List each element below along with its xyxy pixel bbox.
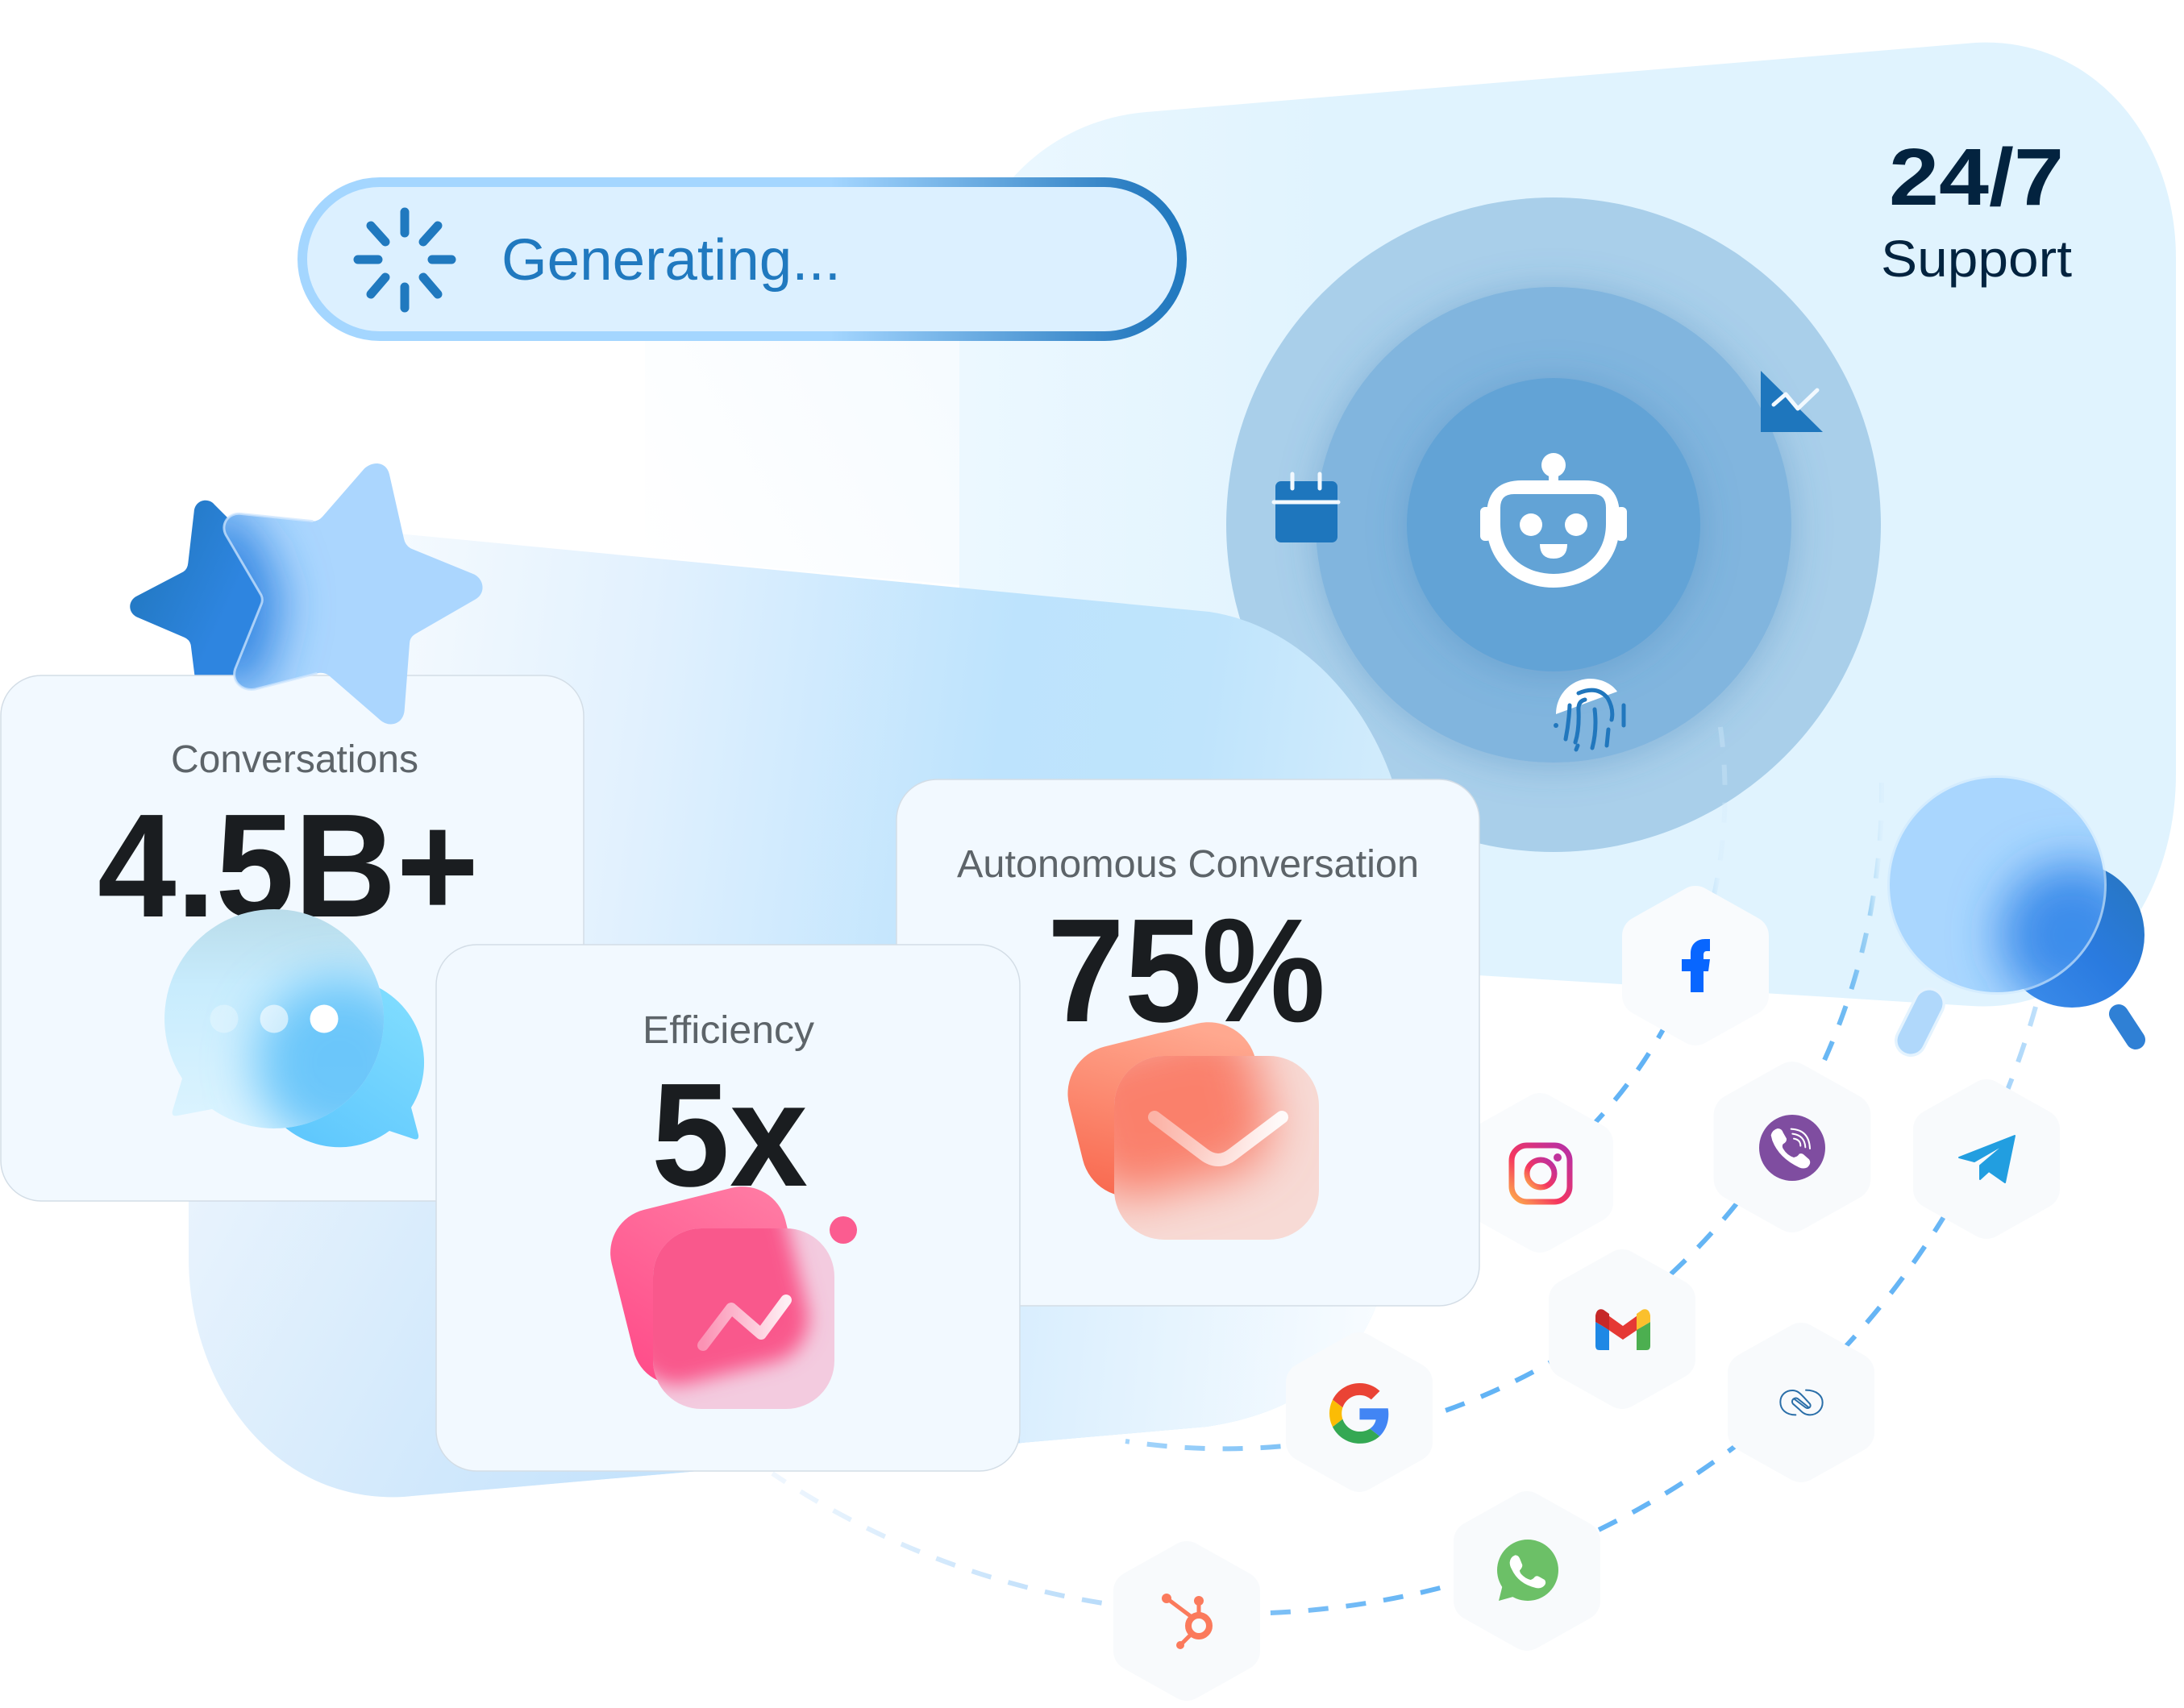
icon: chat bubbles: [164, 909, 424, 1147]
magnifier front glass: [1887, 775, 2107, 995]
number: 5x: 5x: [651, 1052, 808, 1217]
icon: robot: [1480, 453, 1627, 588]
icon: spinner: [358, 212, 451, 308]
background blob: lower left: [161, 525, 1423, 1515]
hex: gmail: [1569, 1270, 1675, 1389]
label: Efficiency: Efficiency: [643, 1009, 814, 1052]
generating pill: [302, 182, 1182, 336]
icon: back star: [130, 501, 274, 688]
background tint: [645, 341, 959, 585]
icon: front star: [223, 463, 482, 724]
label: Generating: Generating...: [501, 228, 841, 293]
middle ring: [1316, 287, 1791, 763]
outer ring: [1226, 197, 1881, 852]
icon: fingerprint: [1554, 679, 1624, 750]
magnifier back lens: [1999, 862, 2144, 1008]
heading: 24/7: 24/7: [1889, 132, 2064, 222]
hex: link: [1748, 1343, 1854, 1462]
icon: envelope: [1058, 1012, 1319, 1240]
label: Support: Support: [1881, 230, 2072, 288]
inner ring: [1407, 378, 1700, 671]
label: Autonomous Conversation: Autonomous Conversation: [957, 843, 1419, 886]
hex: viber: [1735, 1083, 1849, 1211]
dashed connector arcs: [772, 727, 2036, 1614]
panel: autonomous conversation card: [896, 779, 1479, 1306]
icon: chart tile: [601, 1177, 857, 1409]
hex: whatsapp: [1474, 1511, 1580, 1631]
hex: hubspot: [1134, 1561, 1240, 1681]
hex: instagram: [1487, 1113, 1593, 1232]
icon: calendar: [1274, 474, 1338, 542]
orbit: concentric circles with robot: [1226, 197, 1881, 852]
background blob: top right: [959, 43, 2176, 1007]
number: 4.5B+: 4.5B+: [98, 783, 479, 948]
panel: efficiency card: [436, 945, 1020, 1471]
icon: chart triangle: [1761, 371, 1823, 432]
label: Conversations: Conversations: [171, 738, 418, 781]
icon: magnifier: [1887, 775, 2144, 1041]
hex: telegram: [1933, 1099, 2040, 1219]
hex: google: [1306, 1353, 1412, 1472]
hex: facebook: [1642, 906, 1749, 1025]
panel: conversations card: [1, 675, 584, 1201]
number: 75%: 75%: [1047, 887, 1325, 1053]
stat: 24/7 Support: [1881, 132, 2072, 288]
